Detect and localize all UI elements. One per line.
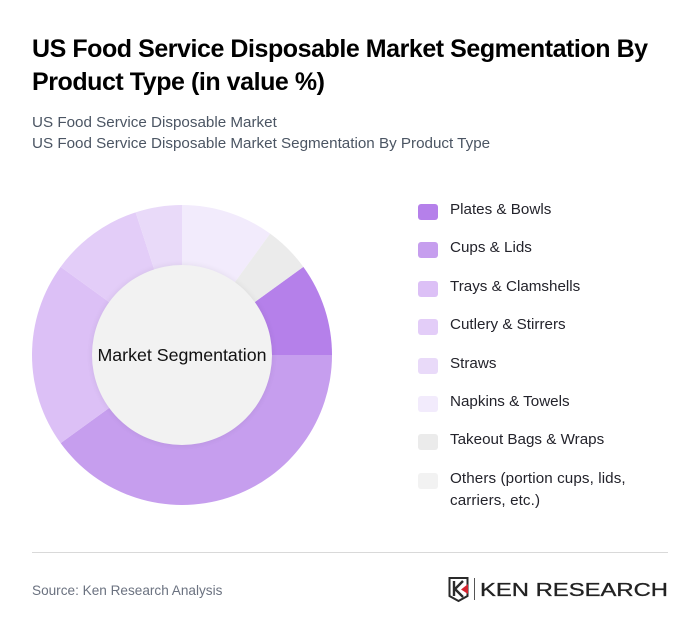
legend label: Plates & Bowls: Plates & Bowls <box>450 201 551 218</box>
divider <box>32 552 668 553</box>
segment: Cups & Lids <box>61 355 332 505</box>
donut chart <box>32 205 332 505</box>
title: Product Type (in value %) <box>32 68 324 96</box>
segment: Cutlery & Stirrers <box>61 212 182 355</box>
legend <box>418 201 626 509</box>
legend swatch: Straws <box>418 358 438 374</box>
logo wordmark: KEN RESEARCH <box>480 579 668 600</box>
segment: Trays & Clamshells <box>32 267 182 443</box>
legend label: Cups & Lids: Cups & Lids <box>450 239 532 256</box>
segment: Straws <box>136 205 182 355</box>
title: US Food Service Disposable Market Segmentation By <box>32 35 648 63</box>
center circle <box>92 265 272 445</box>
legend swatch: Takeout Bags & Wraps <box>418 434 438 450</box>
subtitle: US Food Service Disposable Market <box>32 114 277 131</box>
legend swatch: Cutlery & Stirrers <box>418 319 438 335</box>
logo divider <box>474 578 475 600</box>
legend swatch: Cups & Lids <box>418 242 438 258</box>
subtitle <box>32 114 490 152</box>
title <box>32 35 648 96</box>
legend swatch: Plates & Bowls <box>418 204 438 220</box>
legend label: Takeout Bags & Wraps: Takeout Bags & Wraps <box>450 431 604 448</box>
segment: Takeout Bags & Wraps <box>182 234 303 355</box>
segment: Napkins & Towels <box>182 205 270 355</box>
logo shield icon <box>450 578 468 601</box>
center label: Market Segmentation <box>97 345 267 365</box>
legend label: Others <box>450 470 626 509</box>
legend swatch: Napkins & Towels <box>418 396 438 412</box>
source: Source: Ken Research Analysis <box>32 583 222 598</box>
subtitle: US Food Service Disposable Market Segmentation By Product Type <box>32 135 490 152</box>
legend label: Cutlery & Stirrers: Cutlery & Stirrers <box>450 316 566 333</box>
center shadow <box>91 264 273 446</box>
legend label: Straws: Straws <box>450 355 496 372</box>
segment: Plates & Bowls <box>182 267 332 355</box>
legend label: Trays & Clamshells: Trays & Clamshells <box>450 278 580 295</box>
legend label: Others: Others (portion cups, lids, <box>450 470 626 487</box>
logo: Ken Research <box>448 577 668 602</box>
legend label: Others: carriers, etc.) <box>450 492 540 509</box>
legend label: Napkins & Towels: Napkins & Towels <box>450 393 570 410</box>
legend swatch: Others <box>418 473 438 489</box>
legend swatch: Trays & Clamshells <box>418 281 438 297</box>
